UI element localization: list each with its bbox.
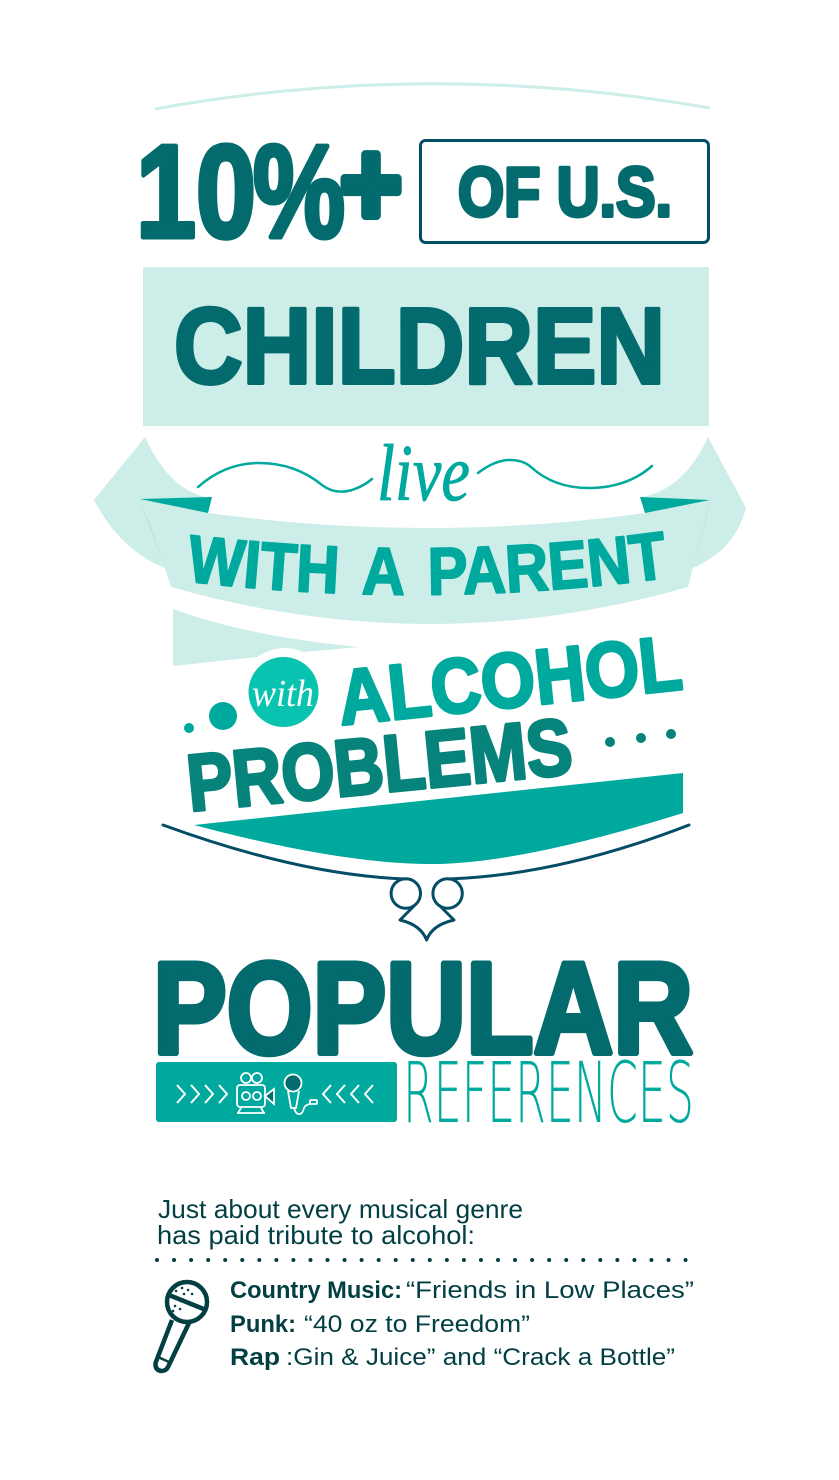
flourish: right swirl	[478, 460, 652, 488]
text block: country music: Country Music:	[230, 1277, 402, 1304]
text block: rap: Rap	[230, 1344, 280, 1371]
text block: punk: Punk:	[230, 1311, 296, 1338]
text block: country music: “Friends in Low Places”	[406, 1277, 694, 1304]
icon: microphone	[284, 1074, 317, 1114]
icon: microphone	[155, 1282, 207, 1371]
ribbon: main banner	[140, 497, 710, 624]
dots: right	[605, 729, 676, 747]
icon: right chevrons	[177, 1085, 227, 1103]
flourish: left swirl	[198, 463, 372, 492]
text block: punk	[230, 1311, 530, 1338]
heading: 10%+: 10	[136, 118, 256, 265]
text block: punk: “40 oz to Freedom”	[304, 1311, 530, 1338]
ornament: curved rule with curls	[163, 825, 689, 940]
panel: children	[143, 267, 709, 426]
text block: intro	[157, 1194, 523, 1250]
icon: left chevrons	[323, 1085, 373, 1103]
heading: popular: POPULAR	[153, 935, 693, 1081]
text block: country music	[230, 1277, 694, 1304]
box: of U.S.: OF U.S.	[458, 153, 672, 231]
badge: with: with	[252, 673, 314, 715]
text block: rap: :Gin & Juice” and “Crack a Bottle”	[286, 1344, 675, 1371]
heading: 10%+: %	[253, 118, 345, 265]
ribbon: main banner: WITH A PARENT	[190, 530, 664, 596]
heading: 10%+	[136, 117, 402, 265]
box: of U.S.	[420, 140, 708, 242]
banner: video and microphone icons	[156, 1062, 397, 1122]
icon: video camera	[237, 1073, 274, 1113]
text block: intro: Just about every musical genre	[158, 1194, 523, 1224]
script word: live: live	[377, 430, 470, 518]
panel: children: CHILDREN	[174, 285, 665, 406]
ribbon: lower fold	[173, 609, 360, 666]
heading: 10%+: +	[340, 117, 402, 251]
ribbon: left fold	[94, 437, 205, 568]
text block: intro: has paid tribute to alcohol:	[157, 1220, 475, 1250]
badge: with	[248, 657, 318, 727]
dots: left	[184, 702, 237, 733]
heading: problems: PROBLEMS	[183, 702, 576, 828]
ribbon: teal band	[194, 773, 683, 864]
ribbon: right fold	[643, 437, 746, 568]
heading: alcohol: ALCOHOL	[334, 618, 686, 742]
